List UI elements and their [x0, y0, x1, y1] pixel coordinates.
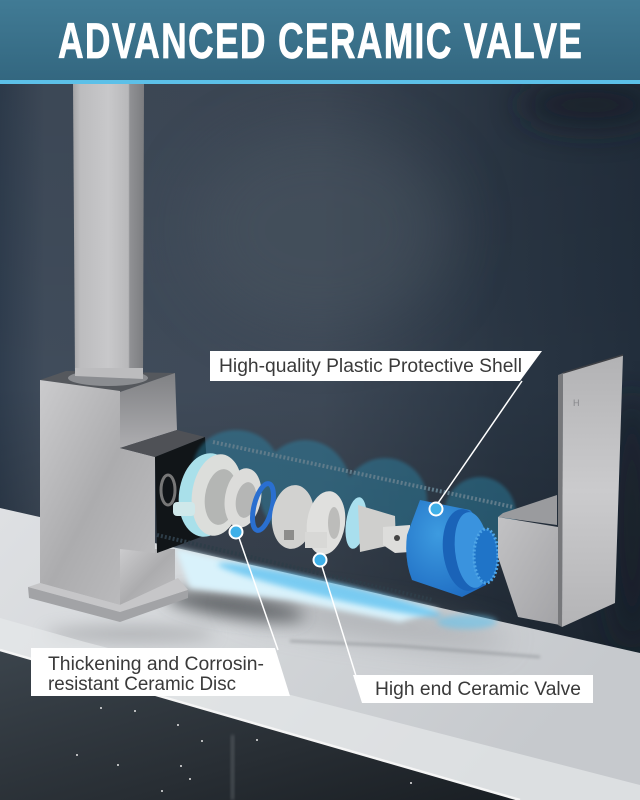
- label: ceramic disc: [31, 648, 290, 696]
- faucet handle: [498, 355, 623, 627]
- leader line: plastic shell: [438, 381, 522, 503]
- faucet spout column: [73, 84, 144, 379]
- faucet handle: H: [573, 398, 580, 408]
- marker: ceramic valve: [314, 554, 326, 566]
- label: ceramic disc: resistant Ceramic Disc: [48, 674, 236, 695]
- label: plastic protective shell: High-quality Plastic Protective Shell: [219, 356, 522, 377]
- part: ceramic disc: [220, 465, 266, 531]
- part: ceramic block: [269, 483, 317, 551]
- part: ceramic valve disc: [303, 489, 349, 557]
- label: ceramic valve: [353, 675, 593, 703]
- title: ADVANCED CERAMIC VALVE: [58, 14, 582, 70]
- faucet body: [28, 368, 212, 622]
- part: valve stem: [342, 496, 410, 553]
- label: ceramic valve: High end Ceramic Valve: [375, 679, 581, 700]
- blue glow rings: [193, 430, 516, 553]
- title banner: [0, 0, 640, 84]
- part: blue plastic cartridge: [406, 500, 498, 597]
- marker: ceramic disc: [230, 526, 242, 538]
- part: blue seal ring: [248, 482, 278, 532]
- wall background: [0, 81, 640, 684]
- dark sink front: [0, 650, 520, 800]
- marble countertop: [0, 508, 640, 800]
- part: white housing disc: [173, 450, 247, 540]
- marker: plastic shell: [430, 502, 442, 516]
- dotted screw lines: [157, 442, 513, 600]
- exploded valve parts: [173, 450, 498, 597]
- label: plastic protective shell: [210, 351, 542, 381]
- leader line: ceramic disc: [237, 532, 278, 650]
- leader line: ceramic valve: [320, 560, 356, 676]
- label: ceramic disc: Thickening and Corrosin-: [48, 654, 264, 675]
